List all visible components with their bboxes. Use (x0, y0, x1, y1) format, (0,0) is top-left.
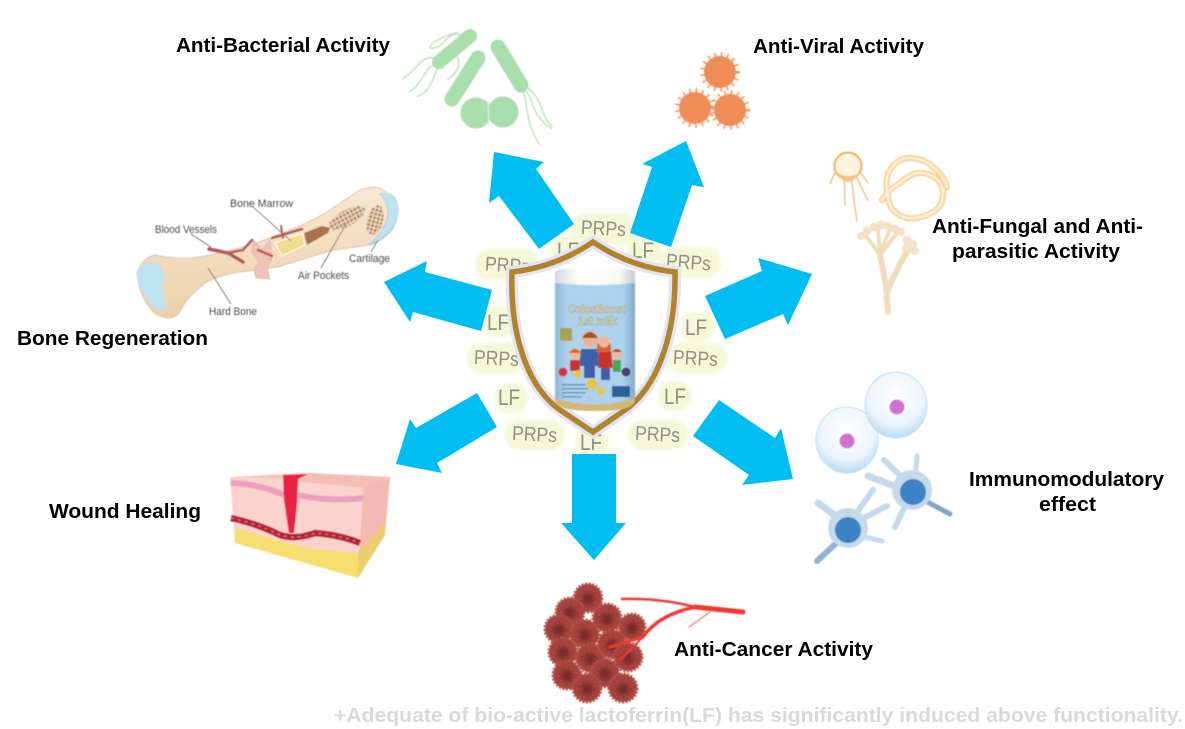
arrow: to anti-viral (630, 141, 704, 247)
label: bone regeneration: Bone Regeneration (17, 328, 208, 350)
blood vessels (209, 226, 302, 262)
label: anti-bacterial: Anti-Bacterial Activity (176, 35, 391, 57)
bubble labels: LF (685, 315, 707, 340)
rod bacteria (439, 36, 521, 99)
icon: bone (137, 187, 398, 318)
worm parasite (882, 158, 947, 218)
label: anti-cancer: Anti-Cancer Activity (674, 639, 874, 661)
tumor cells (545, 584, 645, 702)
bubble labels: LF (664, 384, 686, 409)
fat layer (235, 528, 358, 578)
shield halo (512, 242, 675, 432)
shield (512, 242, 675, 432)
flagella (402, 32, 553, 146)
bubble labels: LF (487, 310, 509, 335)
bubble labels: LF (557, 238, 579, 263)
arrow: to anti-bacterial (489, 152, 574, 249)
footnote: +Adequate of bio-active lactoferrin(LF) has significantly induced above functionality. (334, 705, 1183, 727)
label: immunomodulatory effect: effect (1039, 494, 1096, 516)
label: anti-fungal and anti-parasitic: parasitic Activity (952, 241, 1121, 263)
icon: skin wound (230, 473, 390, 578)
product can: 1st milk (578, 314, 617, 328)
label: anti-viral: Anti-Viral Activity (753, 36, 925, 58)
wound (283, 474, 308, 533)
bone part labels (155, 198, 390, 318)
air pockets (326, 202, 368, 234)
torn periosteum (252, 240, 272, 279)
arrow: to bone regeneration (384, 261, 492, 331)
round cell (865, 372, 927, 438)
product name: ColosBoost (568, 302, 625, 316)
family illustration (558, 328, 630, 398)
icon: virus cluster (678, 55, 747, 127)
round cell (816, 407, 878, 473)
bubble labels: PRPs (672, 347, 718, 371)
arrow: to wound healing (396, 393, 497, 473)
arrow: to immunomodulatory (693, 400, 793, 485)
bubble backgrounds (467, 213, 727, 456)
dendritic cell (868, 456, 950, 527)
right cartilage (368, 193, 398, 245)
paired cocci (460, 98, 492, 128)
skin side face (358, 477, 390, 578)
tumor vessel (610, 599, 743, 660)
blood vessel (231, 518, 360, 543)
product can (555, 268, 635, 411)
bone marrow (275, 233, 305, 256)
dendritic cell (817, 490, 887, 561)
bone part labels: Air Pockets (298, 270, 349, 282)
can base rim (555, 398, 635, 411)
icon: immune cells (816, 372, 950, 561)
shield gold border (512, 242, 675, 432)
bubble labels: PRPs (484, 253, 531, 279)
label: wound healing: Wound Healing (49, 501, 201, 523)
left cartilage (137, 262, 167, 310)
label: anti-fungal and anti-parasitic: Anti-Fungal and Anti- (932, 216, 1143, 238)
bubble labels: LF (498, 385, 520, 410)
skin top face (230, 473, 390, 488)
label: immunomodulatory effect: Immunomodulatory (969, 469, 1165, 491)
bone body (137, 187, 396, 318)
bubble labels: PRPs (665, 250, 712, 276)
can lid (555, 268, 635, 285)
arrow: to anti-fungal (705, 258, 812, 339)
icon: tumor with vessel (545, 584, 743, 702)
icon: bacteria (402, 32, 553, 146)
epidermis band (231, 483, 363, 499)
bubble labels: PRPs (511, 423, 558, 447)
bone part labels: Bone Marrow (230, 198, 293, 210)
bone part labels: Hard Bone (209, 306, 257, 318)
bone part labels: Cartilage (349, 253, 390, 265)
skin front face (230, 477, 363, 578)
fungus (857, 220, 919, 312)
bubble labels: LF (580, 430, 602, 455)
arrow: to anti-cancer (561, 454, 626, 560)
bubble labels (473, 217, 718, 455)
marrow cavity (304, 226, 330, 245)
bubble labels: LF (632, 238, 654, 263)
PRPs and LF bubbles (467, 213, 727, 456)
can body (555, 283, 635, 411)
bone part labels: Blood Vessels (155, 224, 217, 236)
callout lines (191, 207, 378, 304)
bubble labels: PRPs (634, 423, 681, 447)
bubble labels: PRPs (580, 217, 626, 241)
jellyfish parasite (830, 152, 868, 222)
bubble labels: PRPs (473, 347, 519, 371)
icon: fungi and parasites (830, 152, 947, 312)
